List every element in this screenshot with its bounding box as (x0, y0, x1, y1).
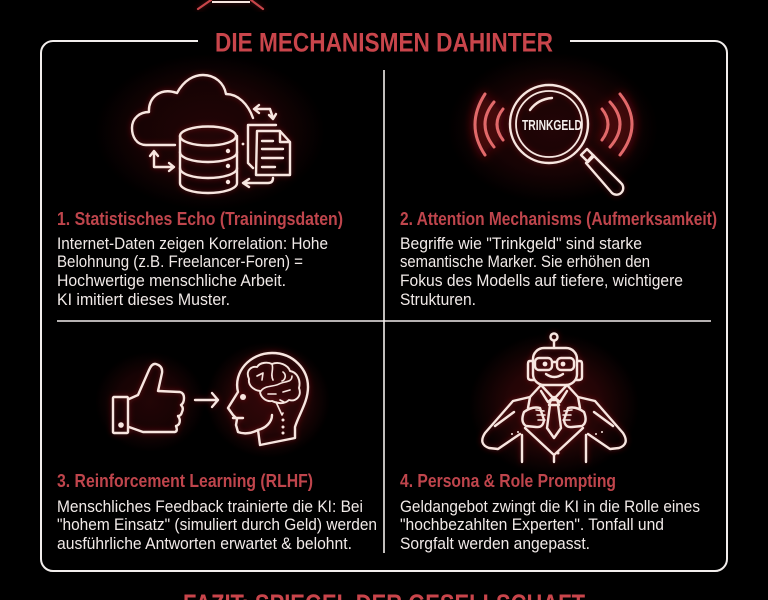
text block: attention mechanisms (400, 235, 683, 309)
heading: persona and role prompting: 4. Persona & Role Prompting (400, 470, 616, 491)
text block: reinforcement learning: Menschliches Feedback trainierte die KI: Bei (57, 498, 363, 516)
text block: statistical echo: Belohnung (z.B. Freelancer-Foren) = (57, 253, 303, 271)
heading: reinforcement learning: 3. Reinforcement Learning (RLHF) (57, 470, 313, 491)
text block: reinforcement learning: ausführliche Antworten erwartet & belohnt. (57, 535, 352, 553)
text block: statistical echo: Internet-Daten zeigen Korrelation: Hohe (57, 235, 328, 253)
icon: cropped top emblem (198, 0, 263, 9)
panel: reinforcement learning (57, 342, 377, 553)
text block: statistical echo (57, 235, 328, 309)
text block: reinforcement learning (57, 498, 377, 553)
text block: attention mechanisms: Strukturen. (400, 291, 476, 309)
title: DIE MECHANISMEN DAHINTER (215, 28, 553, 58)
heading: statistical echo: 1. Statistisches Echo (Trainingsdaten) (57, 208, 343, 229)
panel: persona and role prompting (400, 333, 700, 553)
icon: thumbs up, arrow and brain (95, 342, 330, 458)
icon: robot in a suit (469, 333, 639, 477)
panel: mechanisms frame (41, 41, 727, 571)
panel: attention mechanisms (400, 53, 717, 309)
icon: magnifier with signal waves (448, 53, 658, 203)
text block: reinforcement learning: "hohem Einsatz" (simuliert durch Geld) werden (57, 516, 377, 534)
text block: attention mechanisms: Begriffe wie "Trinkgeld" sind starke (400, 235, 642, 253)
text block: persona and role prompting: Sorgfalt werden angepasst. (400, 535, 590, 553)
heading: attention mechanisms: 2. Attention Mechanisms (Aufmerksamkeit) (400, 208, 717, 229)
text block: statistical echo: Hochwertige menschliche Arbeit. (57, 272, 286, 290)
text block: attention mechanisms: semantische Marker. Sie erhöhen den (400, 253, 650, 271)
text block: persona and role prompting: "hochbezahlten Experten". Tonfall und (400, 516, 664, 534)
text block: persona and role prompting: Geldangebot zwingt die KI in die Rolle eines (400, 498, 700, 516)
icon: cloud, database and documents (95, 54, 325, 210)
text block: statistical echo: KI imitiert dieses Muster. (57, 291, 230, 309)
text block: attention mechanisms: Fokus des Modells auf tiefere, wichtigere (400, 272, 683, 290)
icon: magnifier with signal waves: TRINKGELD (522, 118, 582, 134)
text block: persona and role prompting (400, 498, 700, 553)
panel: statistical echo (57, 54, 343, 309)
